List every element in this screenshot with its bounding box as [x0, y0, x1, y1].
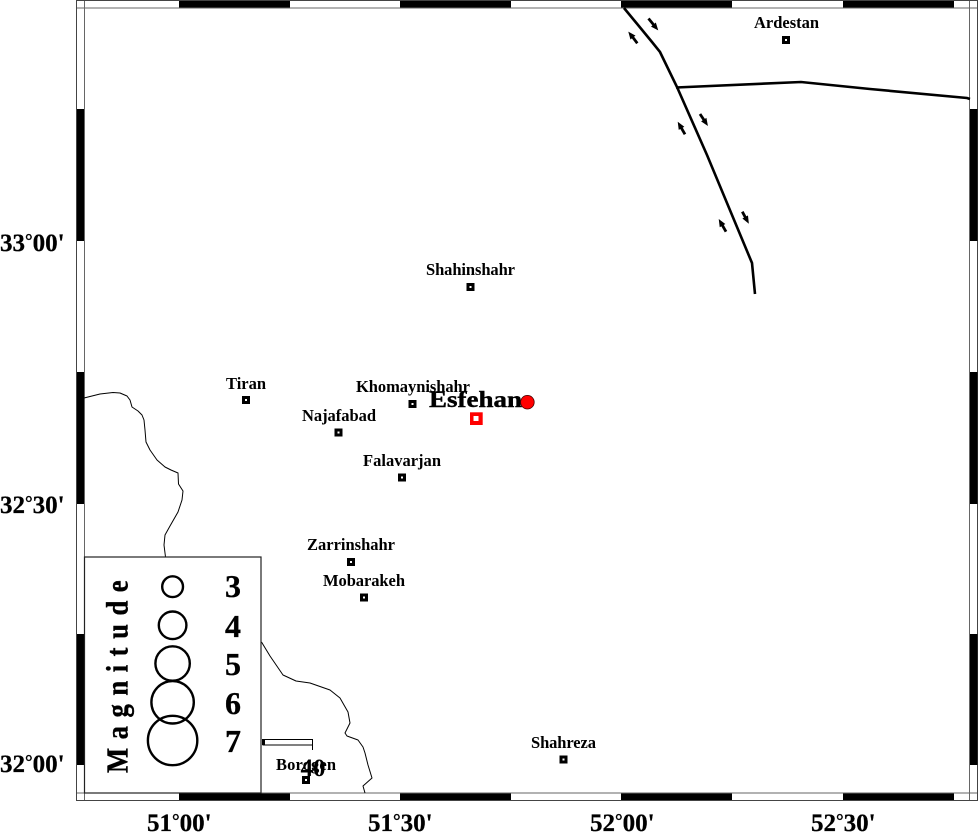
longitude axis labels: °	[393, 811, 401, 832]
legend values: 7	[225, 723, 241, 759]
city: Ardestan	[754, 13, 819, 44]
legend values: 3	[225, 568, 241, 604]
city: Borogen: Borogen	[276, 755, 336, 774]
earthquake epicentre	[521, 395, 534, 409]
latitude axis labels: 00'	[33, 230, 65, 257]
longitude axis labels: °	[172, 811, 180, 832]
city: Ardestan: Ardestan	[754, 13, 819, 32]
city: Khomaynishahr	[356, 377, 470, 408]
latitude axis labels: 33	[0, 230, 25, 257]
strike-slip motion arrows	[629, 18, 748, 232]
legend values	[225, 568, 241, 759]
city: Mobarakeh: Mobarakeh	[323, 571, 405, 590]
city: Shahreza: Shahreza	[531, 733, 596, 752]
latitude axis labels	[0, 230, 65, 778]
longitude axis labels: °	[836, 811, 844, 832]
city: Shahreza	[531, 733, 596, 764]
fault lines	[624, 8, 970, 294]
legend circles	[148, 576, 197, 765]
latitude axis labels: 00'	[33, 751, 65, 778]
legend values: 5	[225, 646, 241, 682]
city: Shahinshahr: Shahinshahr	[426, 260, 515, 279]
city: Zarrinshahr: Zarrinshahr	[307, 535, 395, 554]
latitude axis labels: 30'	[33, 492, 65, 519]
city: Esfehan capital label	[429, 387, 522, 425]
city: Najafabad: Najafabad	[302, 406, 376, 425]
legend: magnitude	[84, 557, 261, 793]
scale bar	[262, 739, 326, 782]
city: Khomaynishahr: Khomaynishahr	[356, 377, 470, 396]
latitude axis labels: °	[25, 752, 33, 773]
city: Zarrinshahr	[307, 535, 395, 566]
city: Falavarjan: Falavarjan	[363, 451, 441, 470]
city: Esfehan capital label: Esfehan	[429, 387, 522, 412]
legend values: 4	[225, 608, 241, 644]
latitude axis labels: °	[25, 231, 33, 252]
city: Borogen	[276, 755, 336, 784]
longitude axis labels: °	[615, 811, 623, 832]
city: Tiran	[226, 374, 266, 404]
latitude axis labels: °	[25, 493, 33, 514]
city: Shahinshahr	[426, 260, 515, 291]
latitude axis labels: 32	[0, 492, 25, 519]
river / boundary line	[84, 392, 372, 793]
city: Mobarakeh	[323, 571, 405, 602]
city: Najafabad	[302, 406, 376, 436]
longitude axis labels	[147, 810, 876, 832]
latitude axis labels: 32	[0, 751, 25, 778]
legend title: Magnitude	[101, 580, 135, 773]
legend values: 6	[225, 685, 241, 721]
city: Falavarjan	[363, 451, 441, 482]
city: Tiran: Tiran	[226, 374, 266, 393]
scale bar: 40	[300, 755, 326, 782]
